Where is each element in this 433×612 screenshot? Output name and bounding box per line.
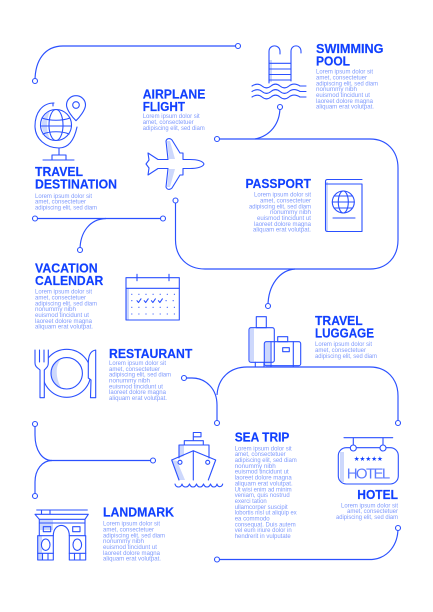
text: restaurant body: Lorem ipsum dolor sit (109, 360, 166, 367)
icon: globe with pin (35, 96, 86, 160)
text: restaurant body: amet, consectetuer (109, 366, 160, 373)
text: hotel sign lettering: ★★★★★ (354, 455, 383, 463)
text: landmark body: adipiscing elit, sed diam (103, 532, 165, 539)
heading: vacation calendar: CALENDAR (35, 273, 104, 288)
text: sea trip body: Lorem ipsum dolor sit (235, 445, 292, 452)
text: vacation calendar body: nonummy nibh (35, 306, 77, 313)
text: sea trip body (235, 445, 298, 540)
text: travel destination body: adipiscing elit, sed diam (35, 204, 97, 211)
text: sea trip body: laoreet dolore magna (235, 474, 292, 482)
text: travel destination body (35, 193, 97, 211)
text: hotel body (336, 502, 398, 521)
text: restaurant body (109, 360, 171, 402)
heading: travel luggage: TRAVEL (315, 313, 363, 328)
text: swimming pool body: aliquam erat volutpat. (316, 104, 374, 111)
heading: travel destination (35, 164, 117, 191)
text: sea trip body: euismod tincidunt ut (235, 469, 289, 476)
text: airplane flight body: adipiscing elit, sed diam (143, 125, 205, 132)
text: sea trip body: nonummy nibh (235, 463, 276, 470)
heading: airplane flight (143, 86, 206, 114)
heading: sea trip: SEA TRIP (235, 430, 290, 445)
heading: vacation calendar: VACATION (35, 261, 98, 276)
text: sea trip body: adipiscing elit, sed diam (235, 457, 297, 464)
heading: travel luggage: LUGGAGE (315, 325, 374, 340)
text: restaurant body: aliquam erat volutpat. (109, 395, 167, 402)
text: vacation calendar body: laoreet dolore magna (35, 318, 93, 325)
icon: ship (172, 432, 223, 487)
text: landmark body: euismod tincidunt ut (103, 544, 157, 551)
connector: bottom line (214, 526, 400, 562)
text: sea trip body: consequat. Duis autem (235, 521, 296, 528)
text: passport body: nonummy nibh (270, 209, 312, 216)
text: sea trip body: ullamcorper suscipit (235, 504, 288, 511)
text: passport body (249, 192, 312, 234)
text: restaurant body: adipiscing elit, sed diam (109, 372, 171, 379)
icon: passport (326, 180, 362, 232)
heading: vacation calendar (35, 261, 104, 288)
text: sea trip body: aliquam erat volutpat. (235, 480, 293, 487)
text: sea trip body: ea commodo (235, 516, 270, 522)
connector: top line (32, 44, 240, 84)
text: airplane flight body: Lorem ipsum dolor sit (143, 113, 200, 120)
text: landmark body: nonummy nibh (103, 538, 145, 545)
text: sea trip body: lobortis nisl ut aliquip ex (235, 510, 298, 517)
text: airplane flight body: amet, consectetuer (143, 119, 194, 126)
connector: luggage arch (182, 367, 400, 426)
text: swimming pool body (316, 69, 378, 111)
text: hotel body: amet, consectetuer (347, 508, 398, 515)
text: passport body: Lorem ipsum dolor sit (254, 192, 311, 199)
text: landmark body: laoreet dolore magna (103, 550, 161, 557)
text: passport body: aliquam erat volutpat. (253, 227, 311, 234)
text: swimming pool body: amet, consectetuer (316, 74, 367, 82)
text: restaurant body: laoreet dolore magna (109, 389, 167, 396)
text: restaurant body: nonummy nibh (109, 377, 151, 384)
icon: triumphal arch landmark (35, 510, 88, 560)
connector: large loop around passport (173, 104, 398, 308)
icon: airplane (146, 139, 204, 189)
text: travel destination body: amet, consectetuer (35, 199, 86, 206)
text: passport body: adipiscing elit, sed diam (249, 203, 311, 210)
icon: plate with fork and knife (35, 349, 96, 398)
heading: travel destination: TRAVEL (35, 164, 83, 179)
text: vacation calendar body: adipiscing elit, sed diam (35, 300, 97, 307)
heading: airplane flight: AIRPLANE (143, 86, 206, 101)
text: landmark body: amet, consectetuer (103, 526, 154, 534)
text: vacation calendar body (35, 289, 97, 331)
heading: swimming pool (316, 41, 384, 69)
text: restaurant body: euismod tincidunt ut (109, 383, 163, 390)
icon: luggage (249, 317, 301, 367)
connector: lower left fork (32, 422, 156, 498)
icon: swimming pool ladder (252, 46, 306, 99)
text: landmark body (103, 521, 165, 563)
text: sea trip body: hendrerit in vulputate (235, 533, 291, 540)
heading: landmark: LANDMARK (103, 505, 175, 520)
text: swimming pool body: laoreet dolore magna (316, 98, 374, 105)
heading: travel destination: DESTINATION (35, 176, 117, 191)
heading: hotel: HOTEL (357, 487, 398, 502)
text: vacation calendar body: Lorem ipsum dolor sit (35, 289, 92, 296)
text: landmark body: aliquam erat volutpat. (103, 556, 161, 563)
text: travel luggage body: amet, consectetuer (315, 347, 366, 354)
text: sea trip body: vel eum iriure dolor in (235, 527, 292, 534)
heading: airplane flight: FLIGHT (143, 99, 185, 114)
heading: swimming pool: SWIMMING (316, 41, 384, 56)
text: sea trip body: amet, consectetuer (235, 451, 286, 458)
text: vacation calendar body: aliquam erat volutpat. (35, 324, 93, 331)
text: vacation calendar body: euismod tincidunt ut (35, 312, 89, 319)
text: landmark body: Lorem ipsum dolor sit (103, 521, 160, 528)
text: hotel body: Lorem ipsum dolor sit (341, 502, 398, 509)
icon: hotel sign (338, 438, 398, 484)
text: travel luggage body: Lorem ipsum dolor sit (315, 341, 372, 348)
icon: calendar (126, 274, 179, 320)
text: passport body: euismod tincidunt ut (257, 215, 311, 222)
heading: swimming pool: POOL (316, 54, 350, 69)
text: travel luggage body (315, 341, 377, 360)
text: hotel sign lettering (347, 455, 390, 482)
text: sea trip body: Ut wisi enim ad minim (235, 486, 292, 493)
text: travel destination body: Lorem ipsum dolor sit (35, 193, 92, 200)
heading: travel luggage (315, 313, 374, 340)
text: swimming pool body: adipiscing elit, sed diam (316, 80, 378, 87)
text: swimming pool body: Lorem ipsum dolor sit (316, 69, 373, 76)
text: swimming pool body: nonummy nibh (316, 86, 358, 93)
text: passport body: amet, consectetuer (260, 198, 311, 204)
connector: left horizontal branch (32, 216, 166, 252)
text: passport body: laoreet dolore magna (254, 221, 312, 228)
heading: restaurant: RESTAURANT (109, 346, 192, 361)
text: hotel body: adipiscing elit, sed diam (336, 514, 398, 521)
text: hotel sign lettering: HOTEL (347, 465, 390, 482)
text: airplane flight body (143, 113, 205, 132)
text: swimming pool body: euismod tincidunt ut (316, 92, 370, 99)
text: sea trip body: exerci tation (235, 498, 267, 505)
heading: passport: PASSPORT (246, 176, 311, 191)
text: vacation calendar body: amet, consectetuer (35, 294, 86, 302)
text: travel luggage body: adipiscing elit, sed diam (315, 353, 377, 360)
text: sea trip body: veniam, quis nostrud (235, 492, 290, 499)
